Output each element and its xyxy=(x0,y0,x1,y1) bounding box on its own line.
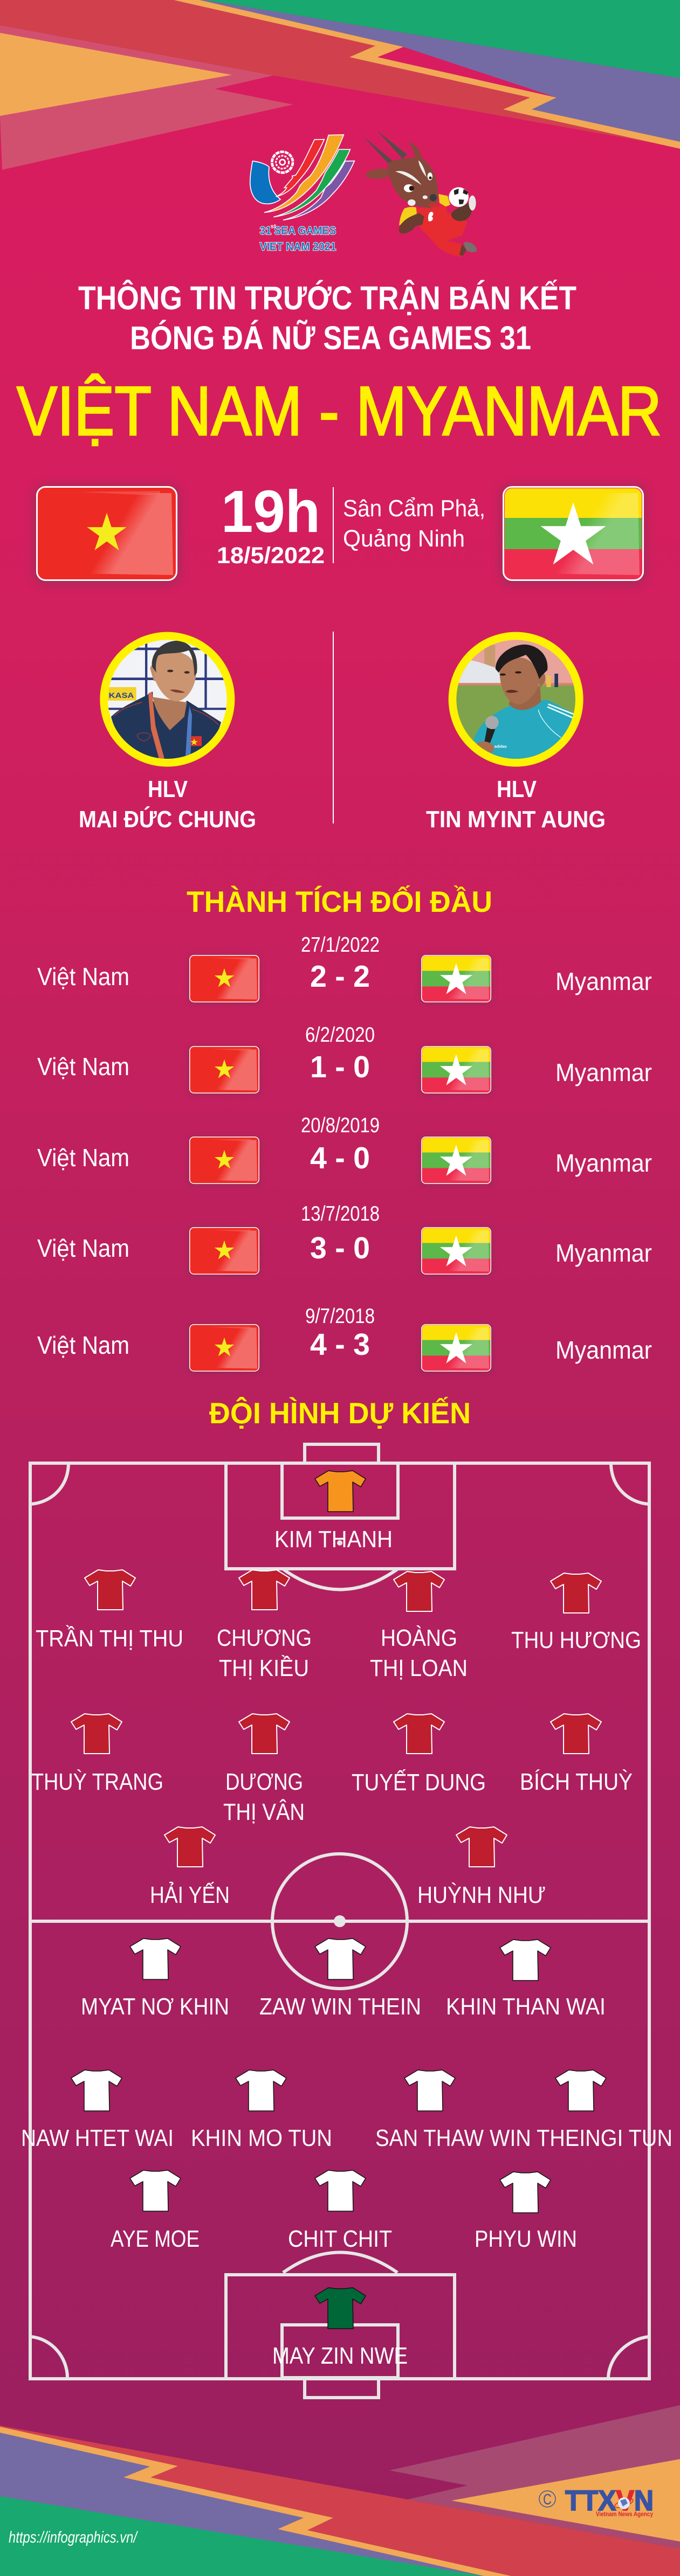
match date: 18/5/2022 xyxy=(217,543,325,569)
match row 13/7/2018: 13/7/2018 xyxy=(301,1202,380,1225)
player: Chương Thị Kiều: CHƯƠNG xyxy=(217,1625,312,1651)
player: Myat Nơ Khin: MYAT NƠ KHIN xyxy=(81,1993,229,2020)
player: Dương Thị Vân: DƯƠNG xyxy=(225,1769,303,1795)
player: Tuyết Dung xyxy=(352,1714,486,1796)
logo: TTXVN: Vietnam News Agency xyxy=(596,2511,654,2518)
divider xyxy=(333,487,334,563)
mascot: sao la playing football xyxy=(363,130,477,257)
coach: Mai Đức Chung xyxy=(79,632,256,833)
player: Huỳnh Như: HUỲNH NHƯ xyxy=(417,1882,546,1908)
top decorative ribbon shapes xyxy=(0,0,680,170)
coach label: HLV xyxy=(497,776,537,802)
divider between coaches xyxy=(333,632,334,823)
lineup: Vietnam xyxy=(31,1471,641,1908)
match row 20/8/2019: 4 - 0 xyxy=(310,1141,370,1175)
coach label: HLV xyxy=(148,776,188,802)
player: Kim Thanh: KIM THANH xyxy=(274,1526,393,1553)
player: Naw Htet Wai xyxy=(21,2070,174,2151)
player: Thu Hương xyxy=(511,1573,641,1653)
player: Thuỳ Trang: THUỲ TRANG xyxy=(31,1769,163,1795)
player: Chit Chit: CHIT CHIT xyxy=(288,2226,392,2252)
title xyxy=(78,280,576,356)
football pitch xyxy=(30,1444,649,2398)
player: Dương Thị Vân: THỊ VÂN xyxy=(223,1799,305,1825)
player: Trần Thị Thu: TRẦN THỊ THU xyxy=(36,1625,183,1652)
player: Bích Thuỳ xyxy=(520,1714,633,1795)
flag: Myanmar xyxy=(500,485,646,584)
source url: https://infographics.vn/ xyxy=(9,2529,138,2546)
coach label xyxy=(79,776,256,833)
player: Huỳnh Như xyxy=(417,1827,546,1908)
match row 9/7/2018: 4 - 3 xyxy=(310,1327,370,1362)
player: Thuỳ Trang xyxy=(31,1714,163,1795)
player: San Thaw xyxy=(375,2070,484,2151)
player: Trần Thị Thu xyxy=(36,1570,183,1652)
match row 6/2/2020: 1 - 0 xyxy=(310,1050,370,1084)
SEA Games 31 logo: st xyxy=(271,223,276,230)
player: Bích Thuỳ: BÍCH THUỲ xyxy=(520,1769,633,1795)
match row 6/2/2020: 6/2/2020 xyxy=(305,1023,375,1047)
player: Hoàng Thị Loan: HOÀNG xyxy=(381,1625,457,1651)
match row 13/7/2018: Myanmar xyxy=(555,1239,652,1267)
match row 6/2/2020 xyxy=(37,1023,652,1095)
player: Khin Mo Tun: KHIN MO TUN xyxy=(191,2125,332,2151)
match row 13/7/2018: Việt Nam xyxy=(37,1234,129,1262)
venue: Sân Cẩm Phả, xyxy=(343,495,485,522)
portrait xyxy=(100,632,235,767)
player: Thu Hương: THU HƯƠNG xyxy=(511,1627,641,1653)
kickoff time: 19h xyxy=(221,479,320,545)
match row 20/8/2019: 20/8/2019 xyxy=(301,1114,380,1137)
flag: Vietnam xyxy=(34,485,180,584)
match row 20/8/2019 xyxy=(37,1114,652,1186)
match row 6/2/2020: Myanmar xyxy=(555,1058,652,1086)
coach label: TIN MYINT AUNG xyxy=(426,806,606,833)
player: Dương Thị Vân xyxy=(223,1714,305,1825)
player: San Thaw: SAN THAW xyxy=(375,2125,484,2151)
match row 6/2/2020: Việt Nam xyxy=(37,1052,129,1081)
player: Hoàng Thị Loan xyxy=(370,1571,468,1681)
head-to-head results table xyxy=(37,933,652,1373)
player: Zaw Win Thein xyxy=(259,1938,421,2020)
player: Phyu Win: PHYU WIN xyxy=(475,2226,577,2252)
portrait: KASA xyxy=(109,691,134,700)
player: Chit Chit xyxy=(288,2170,392,2252)
player: Myat Nơ Khin xyxy=(81,1938,229,2020)
player: Tuyết Dung: TUYẾT DUNG xyxy=(352,1769,486,1796)
player: Chương Thị Kiều xyxy=(217,1570,312,1681)
portrait xyxy=(449,632,583,767)
match row 27/1/2022: 2 - 2 xyxy=(310,959,370,994)
title: THÔNG TIN TRƯỚC TRẬN BÁN KẾT xyxy=(78,280,576,316)
match row 9/7/2018 xyxy=(37,1305,652,1373)
match row 27/1/2022: Việt Nam xyxy=(37,962,129,991)
player: Aye Moe: AYE MOE xyxy=(111,2226,200,2252)
match row 27/1/2022 xyxy=(37,933,652,1004)
logo: TTXVN: C xyxy=(543,2491,552,2508)
lineup: Myanmar xyxy=(21,1938,672,2369)
player: Win Theingi Tun xyxy=(490,2070,672,2151)
match row 20/8/2019: Việt Nam xyxy=(37,1144,129,1172)
match row 9/7/2018: Việt Nam xyxy=(37,1331,129,1359)
heading: head-to-head record: THÀNH TÍCH ĐỐI ĐẦU xyxy=(187,885,492,918)
venue: Quảng Ninh xyxy=(343,525,465,552)
player: May Zin Nwe xyxy=(272,2288,408,2369)
player: Kim Thanh xyxy=(274,1471,393,1553)
player: Khin Than Wai: KHIN THAN WAI xyxy=(446,1993,606,2020)
player: Khin Than Wai xyxy=(446,1940,606,2020)
match row 13/7/2018: 3 - 0 xyxy=(310,1231,370,1265)
title: BÓNG ĐÁ NỮ SEA GAMES 31 xyxy=(130,320,531,356)
logo: TTXVN: TTXVN xyxy=(565,2485,654,2517)
match row 20/8/2019: Myanmar xyxy=(555,1149,652,1177)
player: Zaw Win Thein: ZAW WIN THEIN xyxy=(259,1993,421,2020)
match row 27/1/2022: 27/1/2022 xyxy=(301,933,380,957)
portrait: adidas xyxy=(494,744,507,749)
player: Chương Thị Kiều: THỊ KIỀU xyxy=(219,1654,309,1681)
venue xyxy=(343,495,485,552)
match row 9/7/2018: 9/7/2018 xyxy=(305,1305,375,1328)
player: May Zin Nwe: MAY ZIN NWE xyxy=(272,2343,408,2369)
coach: Tin Myint Aung xyxy=(426,632,606,833)
SEA Games 31 logo: VIET NAM 2021 xyxy=(260,240,336,253)
match row 27/1/2022: Myanmar xyxy=(555,967,652,995)
bottom decorative ribbon shapes xyxy=(0,2405,680,2576)
player: Phyu Win xyxy=(475,2172,577,2252)
SEA Games 31 logo: 31 SEA GAMES xyxy=(260,224,336,237)
heading: expected lineup: ĐỘI HÌNH DỰ KIẾN xyxy=(209,1396,471,1430)
coach label: MAI ĐỨC CHUNG xyxy=(79,806,256,833)
player: Khin Mo Tun xyxy=(191,2070,332,2151)
player: Hải Yến: HẢI YẾN xyxy=(150,1881,230,1908)
player: Aye Moe xyxy=(111,2170,200,2252)
SEA Games 31 logo xyxy=(250,135,354,253)
player: Naw Htet Wai: NAW HTET WAI xyxy=(21,2125,174,2151)
player: Hải Yến xyxy=(150,1827,230,1908)
match row 13/7/2018 xyxy=(37,1202,652,1276)
player: Hoàng Thị Loan: THỊ LOAN xyxy=(370,1655,468,1681)
coach label xyxy=(426,776,606,833)
match row 9/7/2018: Myanmar xyxy=(555,1336,652,1364)
match info xyxy=(34,479,646,584)
